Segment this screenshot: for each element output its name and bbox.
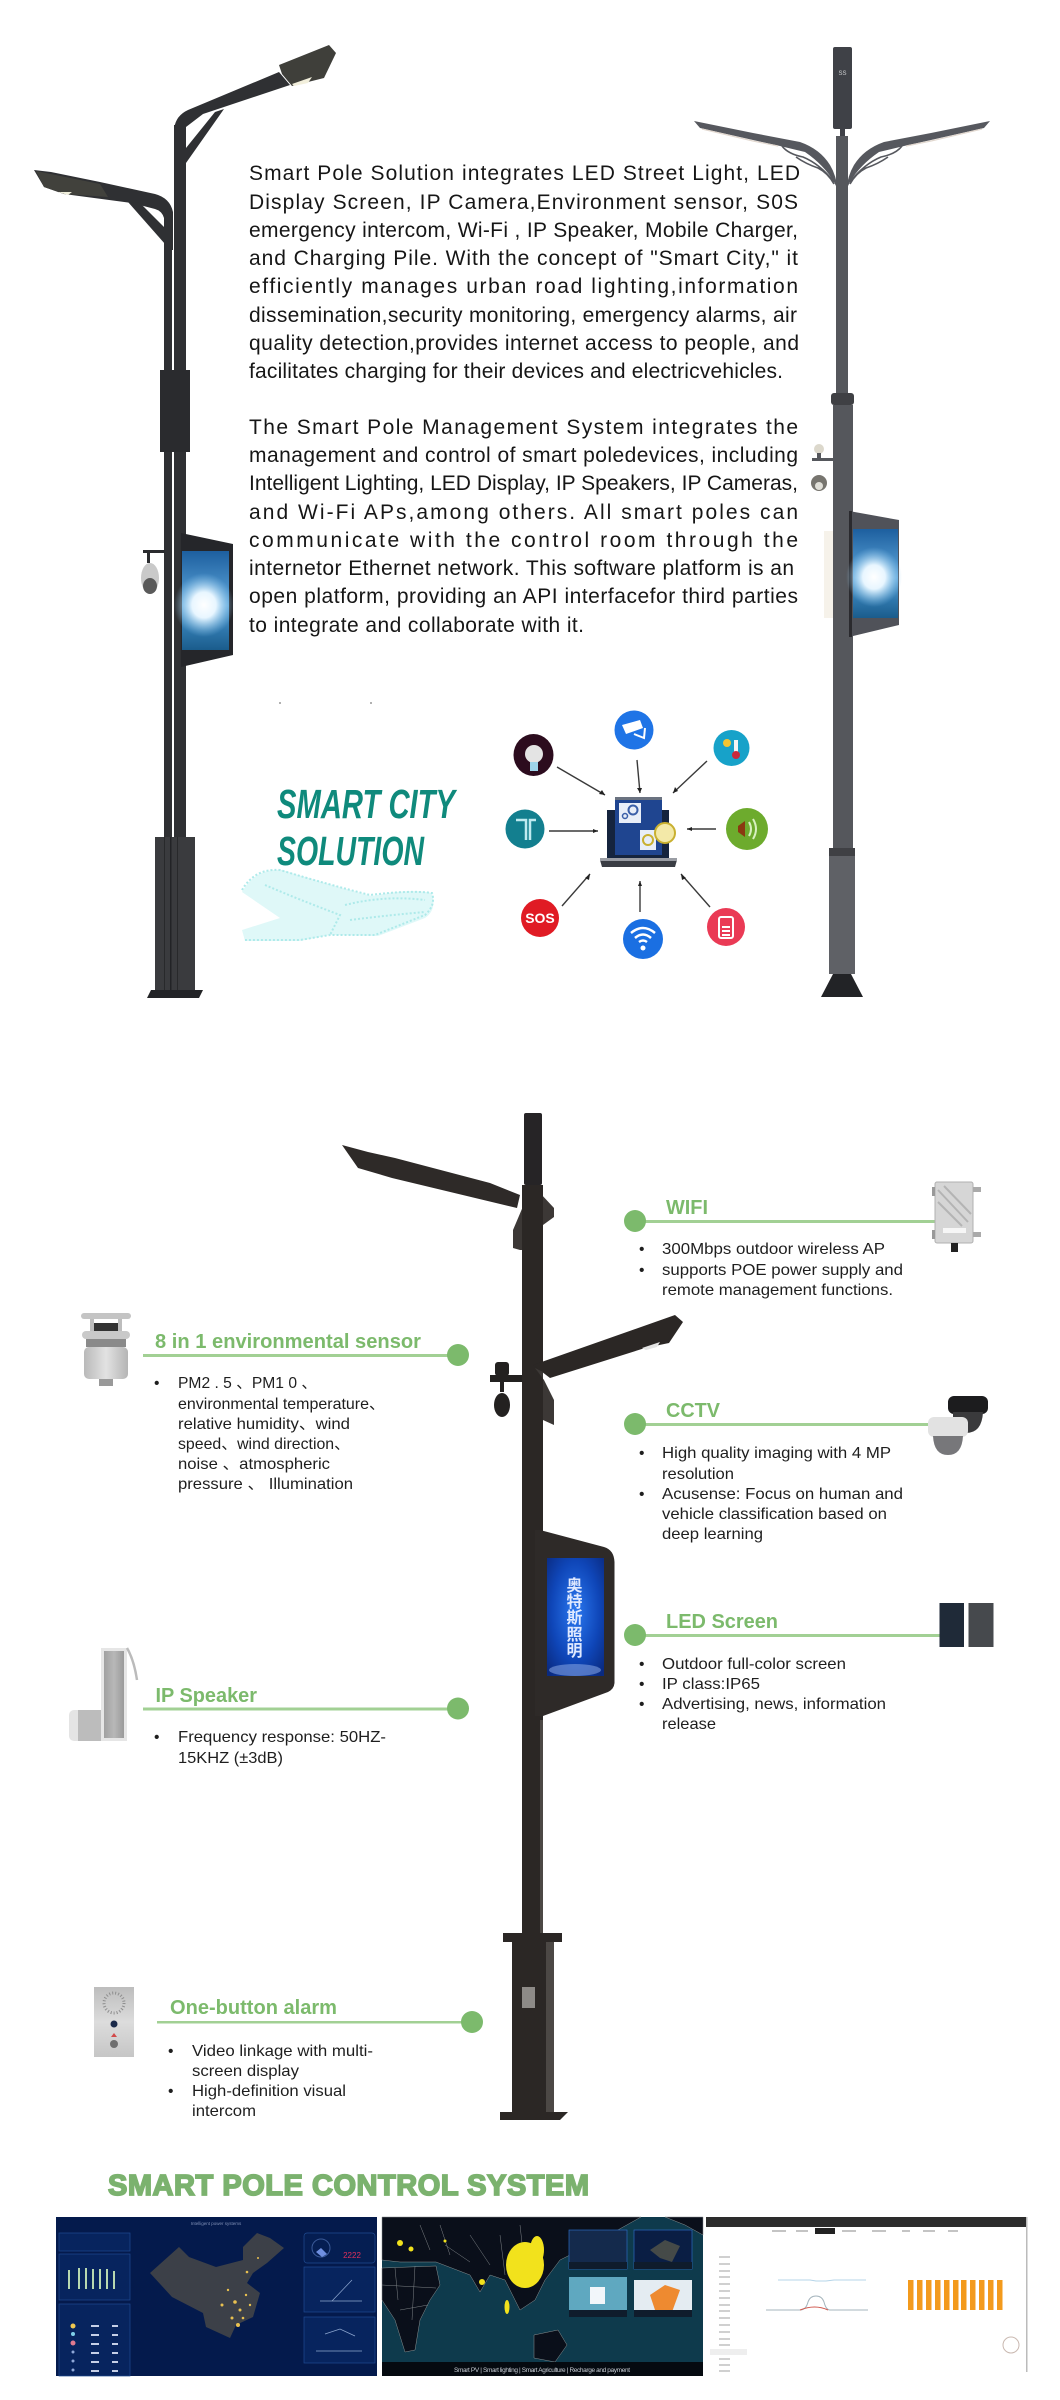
intro paragraph 2: communicate with the control room through the <box>249 529 798 552</box>
screen characters <box>566 1576 583 1660</box>
bullets: release <box>662 1716 716 1733</box>
base flange <box>821 974 863 997</box>
bullets: Frequency response: 50HZ- <box>178 1729 386 1746</box>
LED display on right pole <box>846 511 902 637</box>
connector <box>157 2011 483 2033</box>
central smart pole <box>342 1113 683 2120</box>
bullets <box>639 1656 886 1733</box>
callout: one-button alarm <box>94 1987 483 2120</box>
intro paragraph 1: dissemination,security monitoring, emergency alarms, air <box>249 304 797 327</box>
bullets: Advertising, news, information <box>662 1696 886 1713</box>
pole base <box>147 837 203 998</box>
bullets <box>154 1375 385 1493</box>
bullets: • <box>154 1729 159 1746</box>
right street lamp <box>533 1315 683 1378</box>
intro paragraph 2: and Wi-Fi APs,among others. All smart poles can <box>249 501 798 524</box>
screen characters: 奥 <box>566 1576 583 1595</box>
heading: 8 in 1 environmental sensor <box>155 1331 421 1353</box>
heading: IP Speaker <box>156 1685 257 1707</box>
bullets: • <box>639 1445 644 1462</box>
bullets: PM2 . 5 、PM1 0 、 <box>178 1375 317 1392</box>
intro paragraph 1: Smart Pole Solution integrates LED Street Light, LED <box>249 162 800 185</box>
bullets: • <box>154 1375 159 1392</box>
icon: building <box>506 810 544 848</box>
bullets: speed、wind direction、 <box>178 1436 350 1453</box>
bullets: intercom <box>192 2103 256 2120</box>
pole collar <box>160 370 190 452</box>
header label: Intelligent power systems <box>191 2221 242 2226</box>
icon: dome cameras <box>928 1396 988 1455</box>
icon: speaker <box>726 808 768 850</box>
icon: outdoor access point <box>932 1182 981 1252</box>
callout: LED screen <box>624 1603 994 1733</box>
bullets: • <box>168 2083 173 2100</box>
bullets <box>639 1445 903 1543</box>
icon: smart bulb <box>514 734 554 776</box>
icon: temperature <box>714 730 750 766</box>
intro paragraph 2: The Smart Pole Management System integrates the <box>249 416 798 439</box>
bullets: supports POE power supply and <box>662 1262 903 1279</box>
title: smart pole control system: SMART POLE CONTROL SYSTEM <box>108 2170 589 2202</box>
icon: CCTV <box>614 710 654 750</box>
bar chart <box>908 2280 1002 2310</box>
dashboard: light management <box>706 2217 1028 2372</box>
right panels <box>304 2233 375 2363</box>
dark header <box>706 2217 1026 2227</box>
right scrollbar <box>1026 2217 1028 2372</box>
bullets <box>154 1729 386 1767</box>
callout: 8 in 1 environmental sensor <box>81 1313 469 1493</box>
hot spots <box>397 2236 544 2314</box>
bullets: 300Mbps outdoor wireless AP <box>662 1241 885 1258</box>
icon: SOS <box>521 899 559 937</box>
bullets: High-definition visual <box>192 2083 346 2100</box>
bullets: Acusense: Focus on human and <box>662 1486 903 1503</box>
right smart pole illustration <box>694 47 990 997</box>
upper lamp bracket <box>513 1193 554 1250</box>
bullets: remote management functions. <box>662 1282 893 1299</box>
connector <box>624 1413 929 1435</box>
hand graphic <box>242 870 433 941</box>
smart city network diagram <box>506 710 768 959</box>
intro paragraph 1: facilitates charging for their devices and electricvehicles. <box>249 360 783 383</box>
intro paragraph 1: efficiently manages urban road lighting,information <box>249 275 798 298</box>
bar chart <box>68 2268 115 2289</box>
LED display on left pole <box>174 533 234 667</box>
dashboard: world map <box>382 2217 703 2376</box>
help mascot <box>1003 2337 1019 2353</box>
bullets: • <box>639 1486 644 1503</box>
icon: alarm panel <box>94 1987 134 2057</box>
callout: WIFI <box>624 1182 981 1299</box>
lower street lamp arm <box>34 170 173 250</box>
intro paragraph 2: management and control of smart poledevices, including <box>249 444 798 467</box>
smart city solution logo: SOLUTION <box>277 828 425 874</box>
bullets: resolution <box>662 1466 734 1483</box>
bullets: environmental temperature、 <box>178 1396 385 1413</box>
screen characters: 明 <box>566 1643 583 1660</box>
icon: wifi <box>623 919 663 959</box>
icon: battery <box>707 908 745 946</box>
gauge <box>312 2239 361 2260</box>
bullets: High quality imaging with 4 MP <box>662 1445 891 1462</box>
bullets: Video linkage with multi- <box>192 2043 373 2060</box>
camera and beacon <box>811 444 834 491</box>
bullets: Outdoor full-color screen <box>662 1656 846 1673</box>
nav tabs <box>772 2228 958 2234</box>
connector <box>624 1210 935 1232</box>
camera on bracket <box>141 550 165 594</box>
map cards <box>569 2230 692 2317</box>
bullets: deep learning <box>662 1526 763 1543</box>
twin wing lamps <box>694 121 990 190</box>
bullets: • <box>639 1696 644 1713</box>
gauge: 2222 <box>343 2251 361 2260</box>
icon: environmental sensor <box>81 1313 131 1386</box>
intro paragraph 2: to integrate and collaborate with it. <box>249 614 584 637</box>
bullets: • <box>639 1676 644 1693</box>
bullets: screen display <box>192 2063 299 2080</box>
LED display housing <box>535 1530 614 1716</box>
smart city solution logo <box>242 702 458 941</box>
bullets: • <box>168 2043 173 2060</box>
camera with beacon on arm <box>490 1362 522 1417</box>
bullets: • <box>639 1241 644 1258</box>
pole shafts <box>164 125 186 840</box>
intro paragraph 2: open platform, providing an API interfacefor third parties <box>249 585 798 608</box>
heading: CCTV <box>666 1400 721 1422</box>
intro paragraph 1 <box>249 162 800 383</box>
country borders <box>382 2225 525 2320</box>
callout: IP speaker <box>69 1648 469 1767</box>
intro paragraph 2: internetor Ethernet network. This software platform is an <box>249 557 794 580</box>
icon: SOS: SOS <box>525 910 555 926</box>
connector <box>143 1344 469 1366</box>
top sensor cylinder: SS <box>838 71 847 77</box>
bullets: pressure 、 Illumination <box>178 1476 353 1493</box>
line charts <box>316 2280 362 2351</box>
map markers <box>220 2257 259 2327</box>
table dots <box>70 2324 118 2372</box>
screen characters: 斯 <box>566 1608 583 1627</box>
bullets: 15KHZ (±3dB) <box>178 1750 283 1767</box>
top sensor cylinder <box>833 47 852 136</box>
left smart pole illustration <box>34 45 336 998</box>
icon: screen panels <box>940 1603 994 1647</box>
land masses <box>382 2217 703 2362</box>
intro paragraph 1: Display Screen, IP Camera,Environment sensor, S0S <box>249 191 798 214</box>
intro paragraph 1: emergency intercom, Wi-Fi , IP Speaker, Mobile Charger, <box>249 219 798 242</box>
connector <box>143 1698 469 1720</box>
intro paragraph 1: quality detection,provides internet access to people, and <box>249 332 799 355</box>
top antenna sensor <box>524 1113 542 1195</box>
bullets: • <box>639 1656 644 1673</box>
upper and lower pole <box>829 136 855 974</box>
callout: CCTV <box>624 1396 988 1543</box>
specks <box>279 702 372 704</box>
icon: column speakers <box>69 1648 137 1741</box>
pale side panel <box>824 531 833 618</box>
main pole shaft <box>522 1185 543 1935</box>
bullets: noise 、atmospheric <box>178 1456 330 1473</box>
heading: WIFI <box>666 1197 708 1219</box>
right wing <box>846 121 990 190</box>
connector <box>624 1624 940 1646</box>
bullets <box>639 1241 903 1299</box>
bullets: relative humidity、wind <box>178 1416 350 1433</box>
line chart <box>766 2280 868 2310</box>
left wing <box>694 121 838 190</box>
left street lamp <box>342 1145 520 1208</box>
left panels <box>59 2233 130 2376</box>
lower lamp bracket <box>535 1368 554 1425</box>
intro paragraph 1: and Charging Pile. With the concept of "Smart City," it <box>249 247 798 270</box>
heading: LED Screen <box>666 1611 778 1633</box>
screen characters: 特 <box>566 1592 583 1611</box>
bottom bar <box>382 2362 703 2376</box>
bullets: IP class:IP65 <box>662 1676 760 1693</box>
intro paragraph 2 <box>249 416 798 637</box>
bullets <box>168 2043 373 2120</box>
heading: One-button alarm <box>170 1997 337 2019</box>
bottom bar: Smart PV | Smart lighting | Smart Agriculture | Recharge and payment <box>454 2367 630 2374</box>
icon: laptop with dashboard <box>600 797 677 867</box>
intro paragraph 2: Intelligent Lighting, LED Display, IP Speakers, IP Cameras, <box>249 472 798 495</box>
screen characters: 照 <box>566 1627 583 1644</box>
dashboard: China map <box>56 2217 377 2376</box>
side list <box>710 2256 747 2372</box>
China map <box>150 2233 284 2338</box>
arrows to laptop <box>549 760 716 912</box>
bullets: vehicle classification based on <box>662 1506 887 1523</box>
bullets: • <box>639 1262 644 1279</box>
upper street lamp arm <box>174 45 336 165</box>
pole base cabinet <box>500 1933 568 2120</box>
logo text: SMART CITY <box>277 781 458 827</box>
